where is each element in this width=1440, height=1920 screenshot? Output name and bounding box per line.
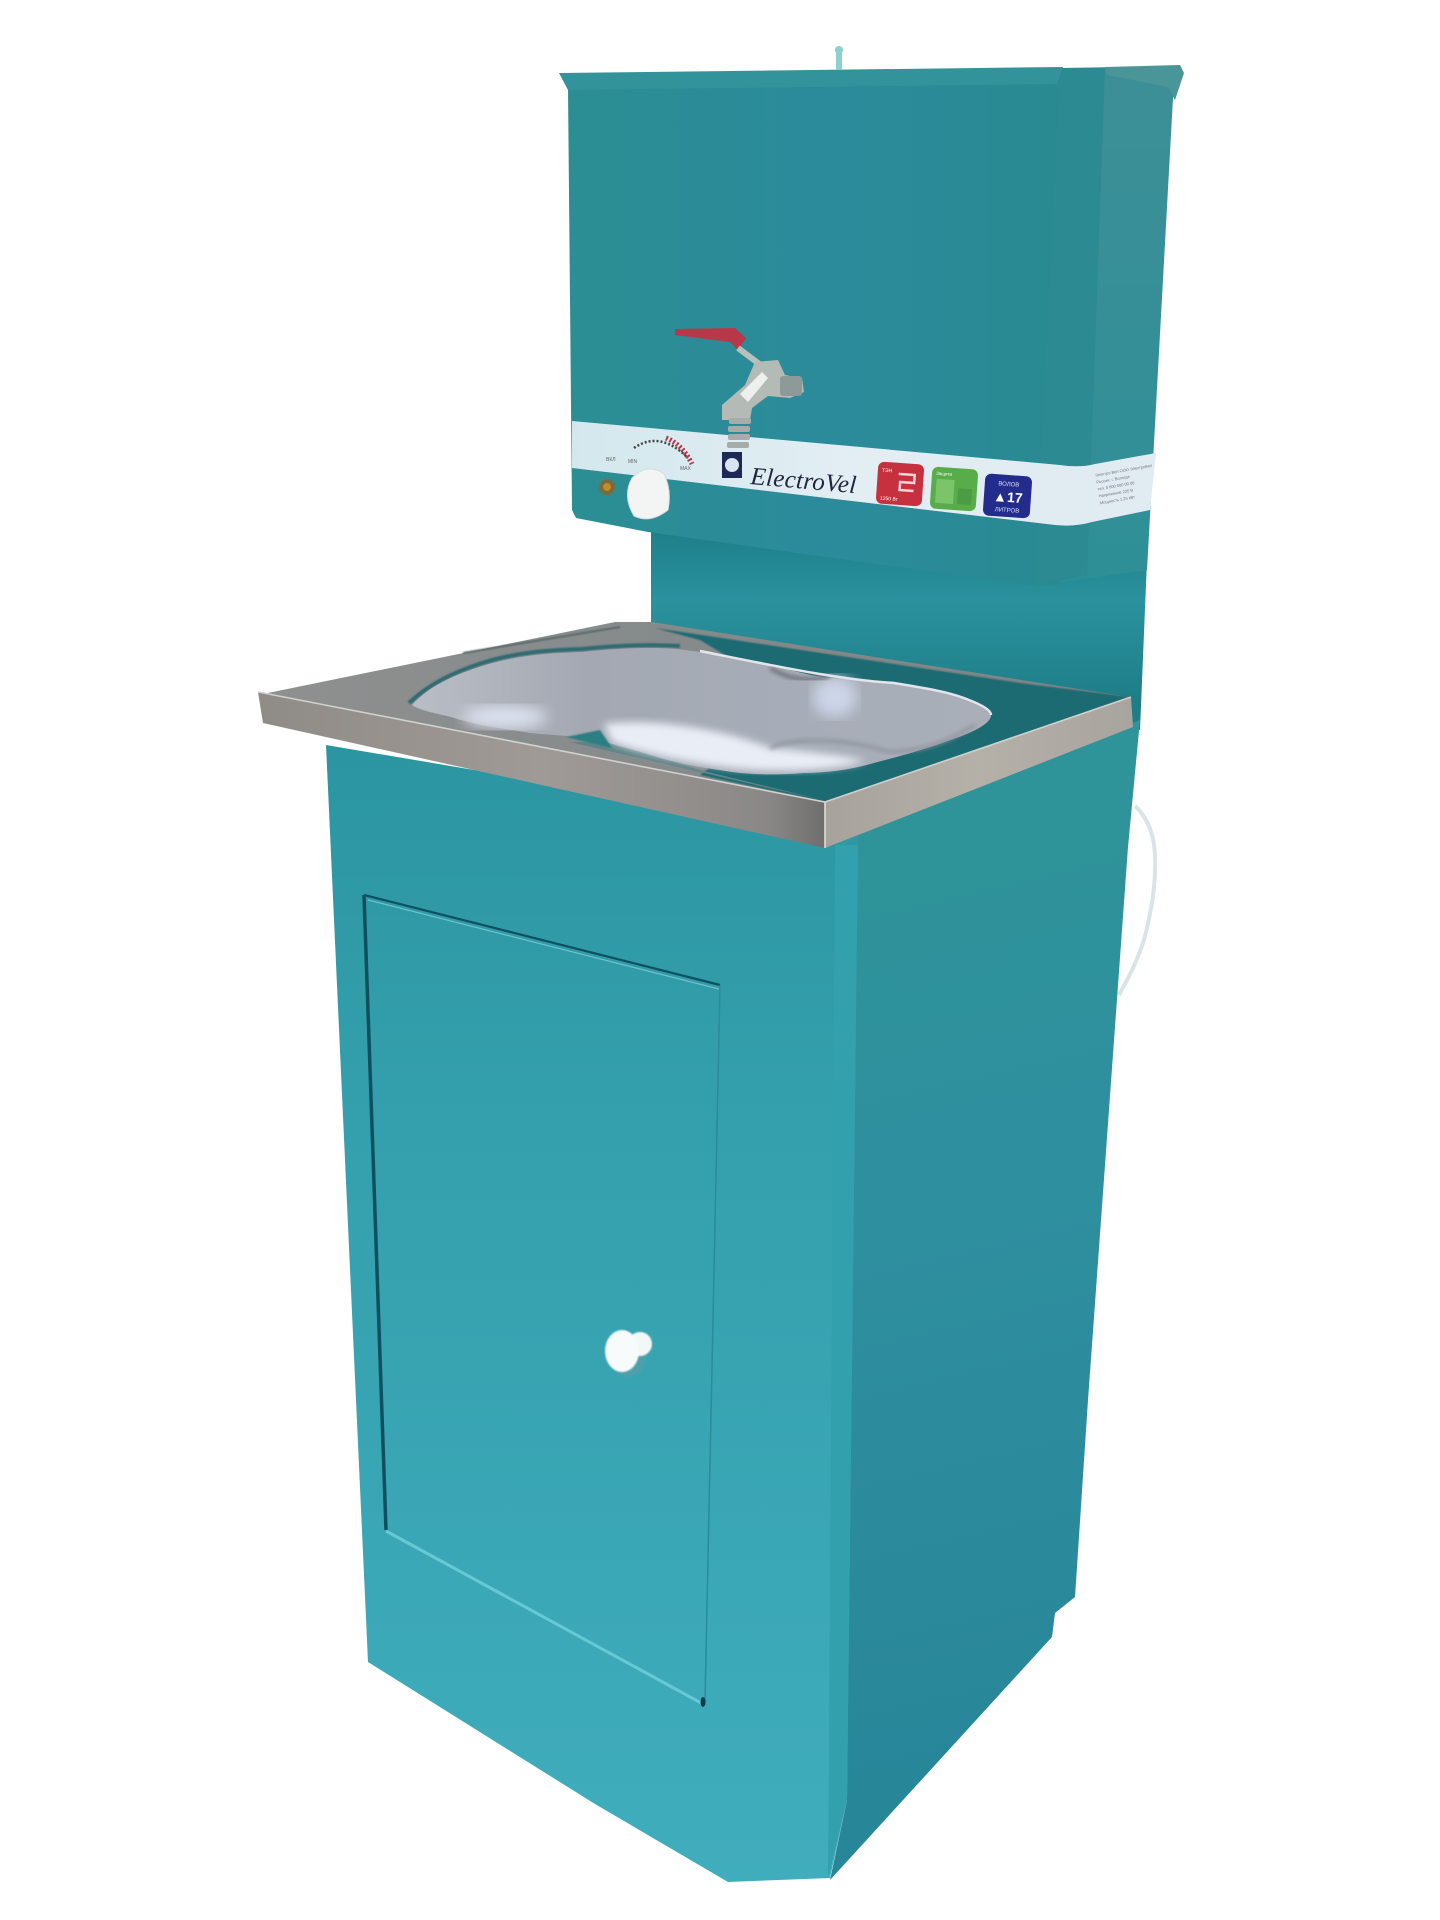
grey-teal deck strip: [570, 742, 823, 800]
sink front rim: [258, 692, 825, 848]
faucet handle: [675, 328, 746, 350]
hose nozzle: [727, 418, 751, 448]
sink right rim: [825, 697, 1133, 848]
label small print: Россия, г. Вологда: [1096, 474, 1131, 485]
power cord: [1119, 806, 1155, 995]
door knob: [605, 1330, 652, 1377]
deck edge slot: [463, 627, 620, 653]
tank side: [1034, 66, 1180, 586]
panel: cabinet: [326, 720, 1140, 1882]
teal reflection on sink deck: [655, 628, 1130, 802]
faucet: [675, 328, 804, 448]
door top highlight: [368, 900, 719, 989]
cabinet front face: [326, 745, 858, 1882]
tank lid front: [559, 67, 1063, 90]
indicator light: [599, 479, 615, 495]
cabinet corner chamfer: [828, 845, 858, 1878]
badge: green: Защита: [936, 471, 953, 477]
sink bowl: [412, 648, 991, 774]
badge: blue volume: ЛИТРОВ: [995, 507, 1019, 515]
thermostat knob: [627, 469, 669, 519]
control dial scale: MAX: [680, 466, 692, 472]
label small print: Мощность 1,25 кВт: [1100, 494, 1135, 505]
bowl groove: [409, 645, 680, 703]
tank front: [568, 70, 1062, 586]
badge: green: [930, 466, 978, 512]
label small print: тел. 8 800 000 00 00: [1097, 480, 1136, 492]
control dial scale: MIN: [628, 459, 638, 465]
door right seam: [705, 985, 720, 1702]
label strip: [572, 421, 1156, 526]
door corner notch: [700, 1697, 706, 1707]
tank corner: [1034, 68, 1105, 586]
badge: blue volume: ВОЛОВ: [998, 481, 1019, 489]
door top shadow: [364, 895, 720, 985]
label small print: Напряжение 220 В: [1098, 487, 1134, 498]
tank top pin: [835, 46, 843, 70]
badge: blue volume: ▲17: [993, 488, 1023, 506]
control dial scale: [606, 438, 692, 472]
logo: [722, 452, 742, 478]
panel: back wall: [651, 520, 1147, 730]
sink top surface: [258, 622, 1130, 802]
label small print: Электро-Вел ООО ЭлектроВел: [1095, 463, 1153, 478]
label small print: [1095, 463, 1158, 505]
badge: blue volume: [983, 473, 1032, 519]
panel: steel sink: [258, 622, 1133, 848]
door lower lip: [386, 1531, 703, 1704]
door: [364, 895, 720, 1702]
control dial scale: ВКЛ: [606, 457, 616, 463]
badge: red heater: [876, 461, 924, 507]
tank lid side: [1105, 65, 1184, 100]
door left shadow: [364, 895, 386, 1530]
cabinet side face: [830, 720, 1140, 1880]
badge: red heater: 1250 Вт: [880, 496, 899, 503]
faucet body: [722, 360, 804, 420]
panel: water heater tank: [559, 46, 1184, 586]
badge: red heater: ТЭН: [882, 468, 893, 474]
brand name: ElectroVel: [748, 463, 857, 499]
